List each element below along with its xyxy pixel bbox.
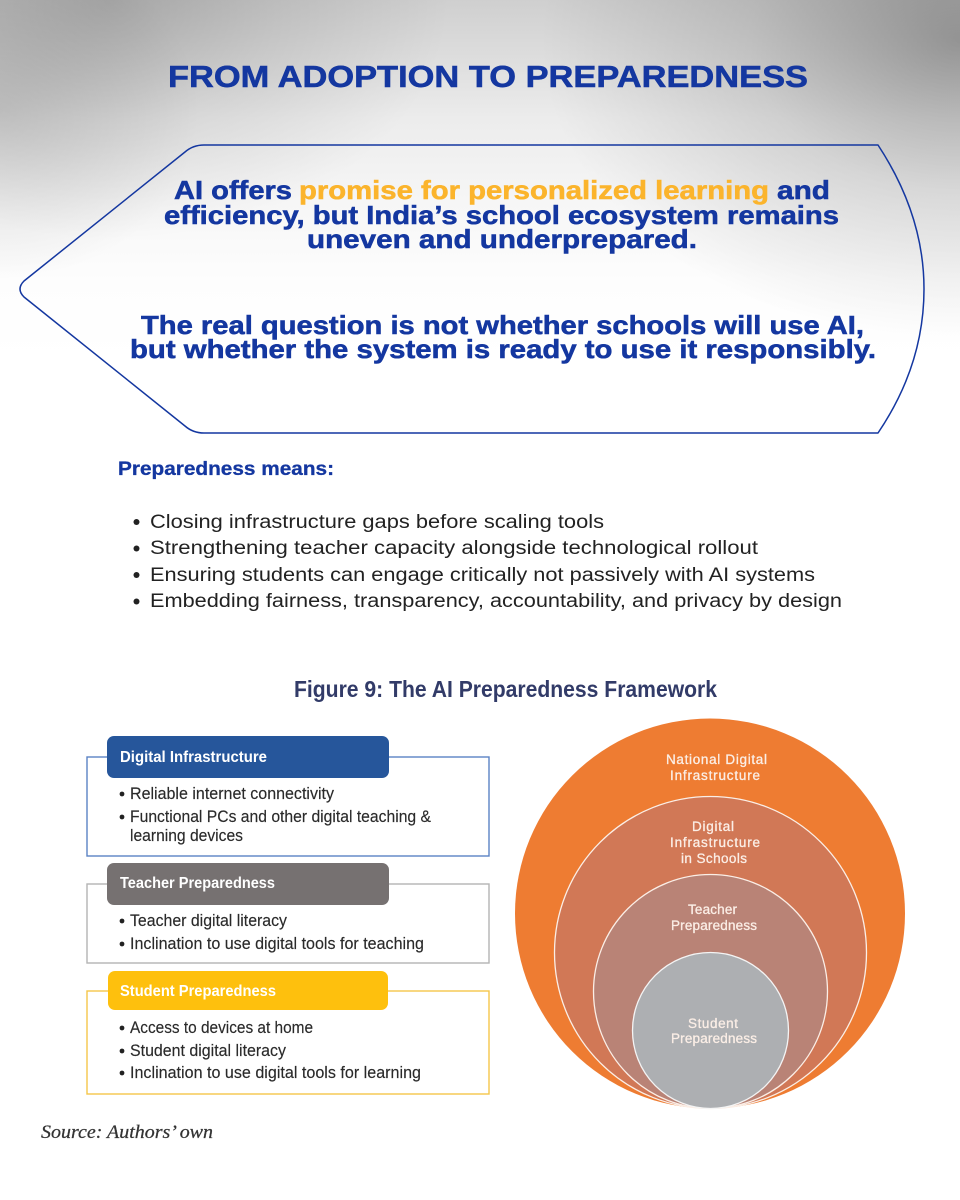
box: digital infrastructure: Functional PCs and other digital teaching & (130, 808, 431, 826)
bullet list: Embedding fairness, transparency, accountability, and privacy by design (150, 591, 842, 612)
box: teacher preparedness: Teacher digital literacy (130, 912, 288, 930)
box: teacher preparedness: Teacher Preparedness (120, 875, 275, 892)
callout text: first statement: and (777, 175, 830, 205)
callout outline (20, 145, 924, 433)
circle: digital infrastructure in schools: Digital (692, 819, 734, 834)
box: digital infrastructure: learning devices (130, 827, 243, 845)
circle: national digital infrastructure: Infrastructure (670, 768, 760, 783)
callout text: first statement: uneven and underprepared. (307, 224, 697, 254)
callout text: first statement: promise for personalized learning (299, 175, 769, 205)
box: student preparedness: Inclination to use digital tools for learning (130, 1064, 421, 1082)
callout text: first statement: efficiency, but India’s school ecosystem remains (164, 200, 839, 230)
figure heading: Figure 9: The AI Preparedness Framework (294, 676, 717, 702)
circle: digital infrastructure in schools: in Schools (681, 851, 747, 866)
circle: digital infrastructure in schools (554, 796, 866, 1108)
circle: national digital infrastructure (515, 718, 905, 1108)
box: digital infrastructure: Digital Infrastructure (120, 749, 267, 766)
bullet list: Closing infrastructure gaps before scaling tools (150, 512, 604, 533)
callout text: second statement: but whether the system is ready to use it responsibly. (130, 334, 876, 364)
circle: student preparedness: Student (688, 1016, 738, 1031)
circle: teacher preparedness: Preparedness (671, 918, 757, 933)
circle: digital infrastructure in schools: Infrastructure (670, 835, 760, 850)
chart: nested preparedness circles (515, 718, 905, 1108)
callout text: second statement (130, 310, 876, 364)
bullet list: Ensuring students can engage critically not passively with AI systems (150, 565, 815, 586)
box: student preparedness (87, 971, 489, 1094)
bullet list: Strengthening teacher capacity alongside technological rollout (150, 538, 759, 559)
box: digital infrastructure: Reliable internet connectivity (130, 785, 335, 803)
box: teacher preparedness (87, 863, 489, 963)
box: student preparedness: Student Preparedness (120, 983, 276, 1000)
circle: national digital infrastructure: National Digital (666, 752, 767, 767)
box: student preparedness: Student digital literacy (130, 1042, 287, 1060)
heading: preparedness means: Preparedness means: (118, 459, 334, 480)
callout text: first statement (164, 175, 839, 254)
bullet list (134, 512, 842, 612)
circle: student preparedness (632, 952, 788, 1108)
source note: Source: Authors’ own (41, 1122, 213, 1143)
callout text: second statement: The real question is not whether schools will use AI, (141, 310, 864, 340)
circle: teacher preparedness (594, 874, 828, 1108)
circle: student preparedness: Preparedness (671, 1031, 757, 1046)
box: teacher preparedness: Inclination to use digital tools for teaching (130, 935, 424, 953)
box: digital infrastructure (87, 736, 489, 856)
box: student preparedness: Access to devices at home (130, 1019, 313, 1037)
circle: teacher preparedness: Teacher (688, 902, 738, 917)
callout text: first statement: AI offers (174, 175, 292, 205)
panel: framework boxes (87, 736, 489, 1094)
title: FROM ADOPTION TO PREPAREDNESS (168, 59, 808, 94)
panel: callout arrow (20, 145, 924, 433)
